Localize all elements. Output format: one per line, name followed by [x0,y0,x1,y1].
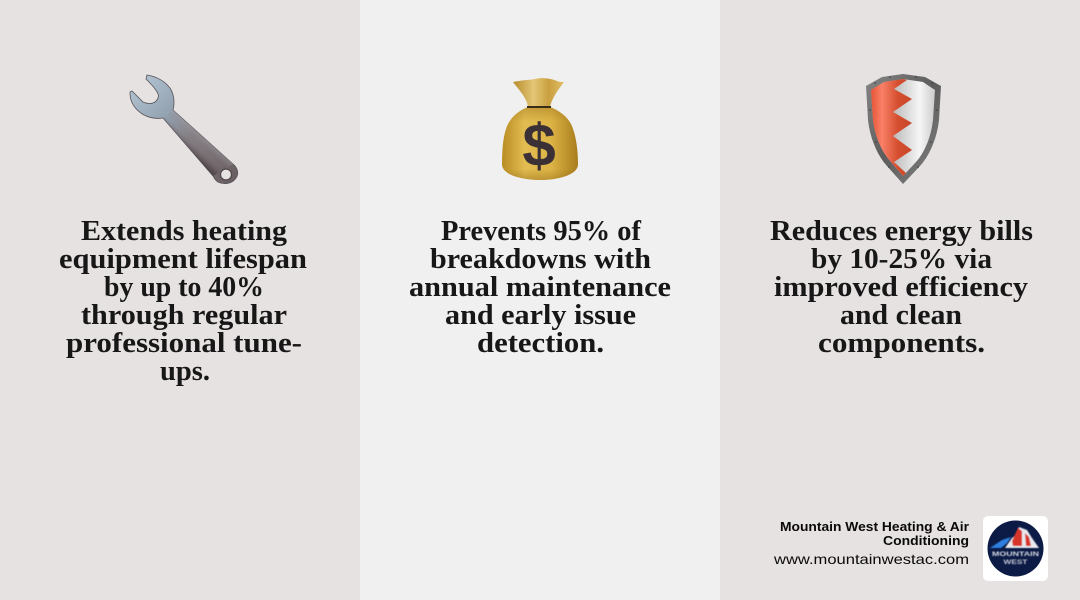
text: prevention benefit: annual maintenance [409,271,671,303]
icon: money bag: $ [522,112,556,179]
company name: Conditioning [883,533,969,548]
company name: Mountain West Heating & Air [780,519,969,534]
company name [780,519,969,548]
text: energy benefit: improved efficiency [774,271,1029,303]
text: lifespan benefit: professional tune- [66,327,302,359]
text: lifespan benefit: by up to 40% [104,271,264,303]
text: lifespan benefit [59,215,307,387]
footer: company branding [773,516,1048,581]
text: energy benefit: components. [818,327,985,359]
panel: equipment lifespan [0,0,360,600]
text: lifespan benefit: Extends heating [81,215,288,247]
icon: shield [866,74,941,184]
text: prevention benefit: breakdowns with [430,243,651,275]
text: lifespan benefit: through regular [81,299,287,331]
logo: MOUNTAIN [992,551,1039,558]
text: lifespan benefit: equipment lifespan [59,243,307,275]
text: lifespan benefit: ups. [160,355,210,387]
panel: energy savings [720,0,1080,600]
logo [983,516,1048,581]
panel: breakdown prevention [360,0,720,600]
logo: WEST [1004,559,1028,566]
text: energy benefit: and clean [840,299,962,331]
text: prevention benefit: Prevents 95% of [441,215,641,247]
text: prevention benefit: and early issue [445,299,636,331]
icon: money bag [502,78,578,180]
text: energy benefit: by 10-25% via [811,243,993,275]
text: energy benefit [770,215,1033,359]
text: prevention benefit: detection. [477,327,604,359]
website url: www.mountainwestac.com [773,551,969,567]
icon: wrench [130,75,238,184]
text: prevention benefit [409,215,671,359]
text: energy benefit: Reduces energy bills [770,215,1033,247]
